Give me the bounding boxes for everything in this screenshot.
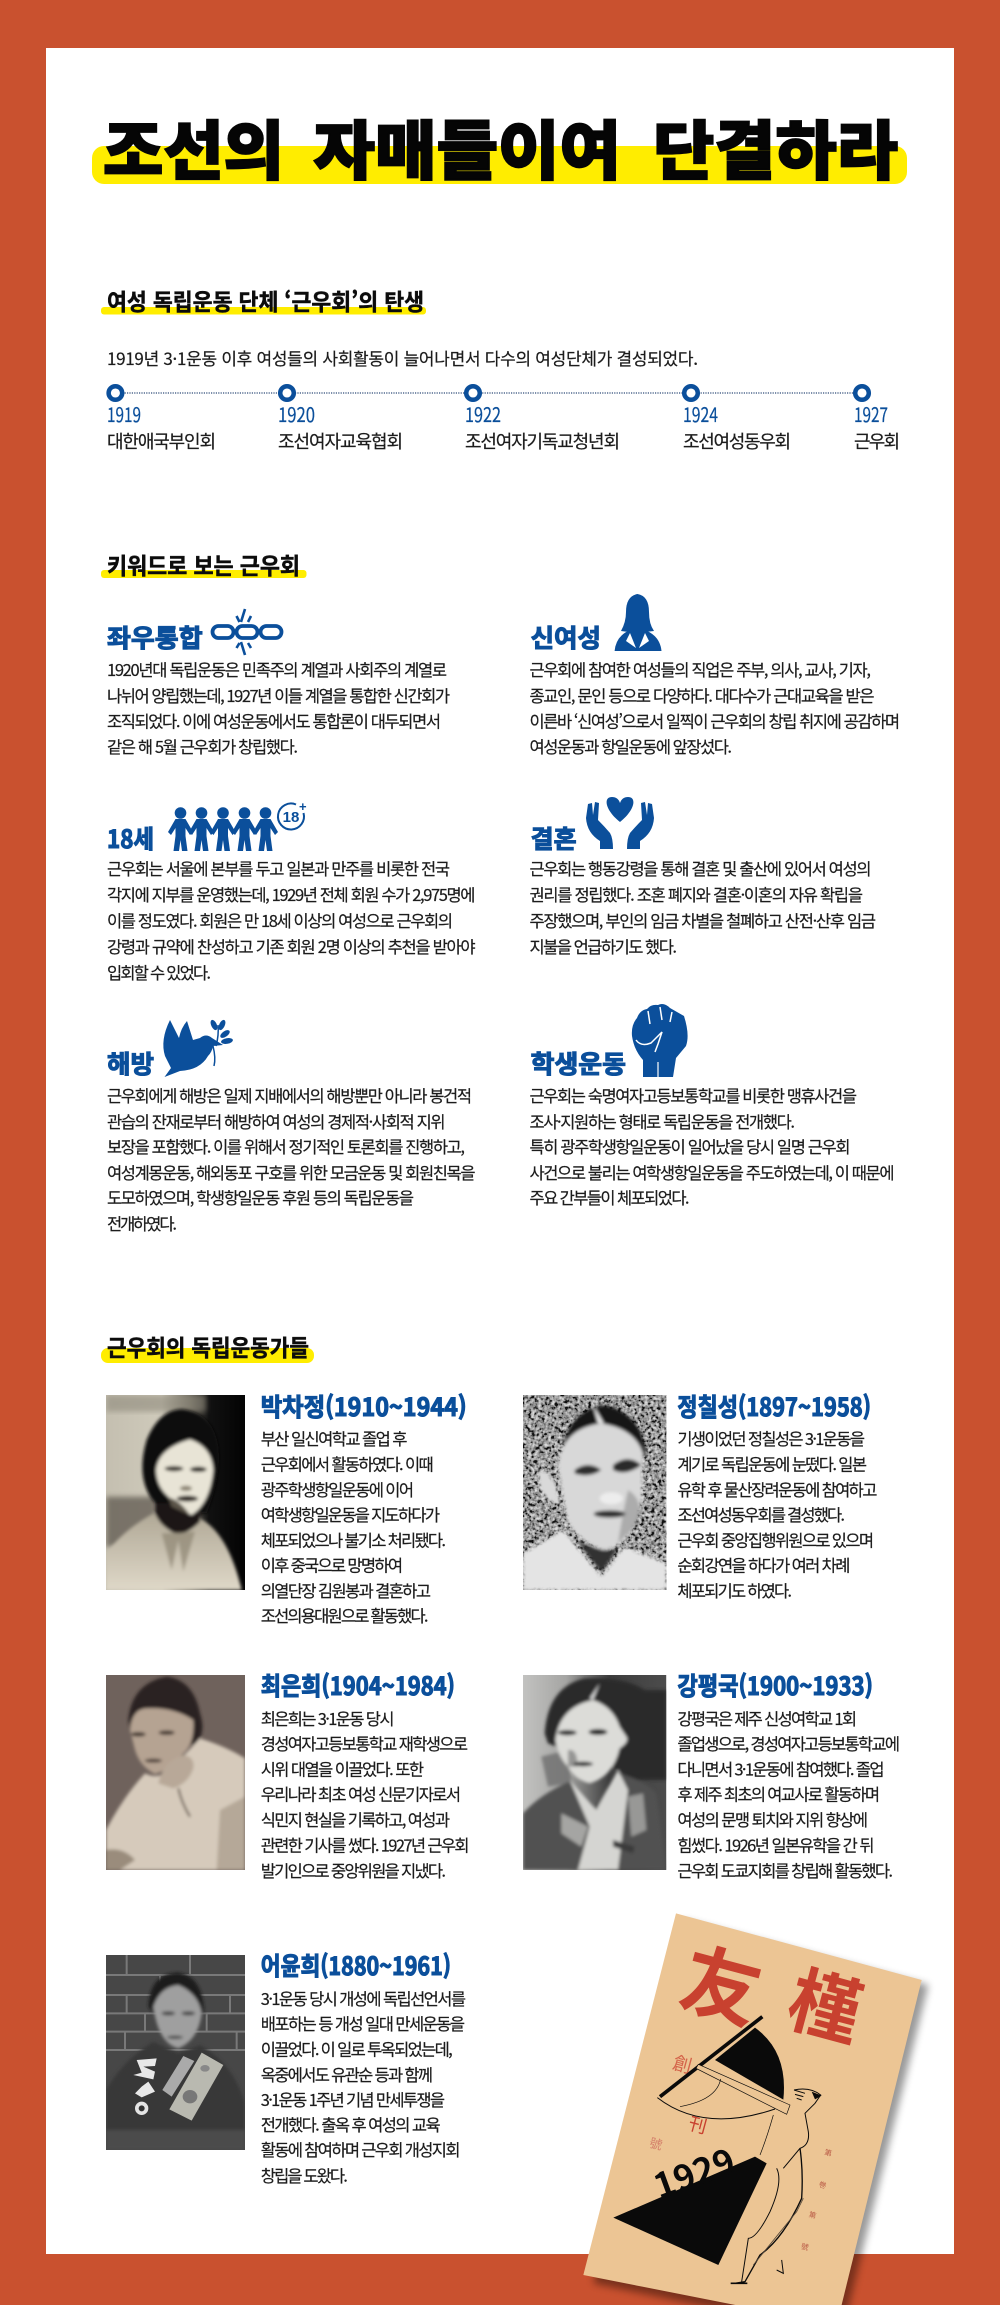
portrait: 박차정 bbox=[106, 1395, 245, 1590]
bio text: 다니면서 3·1운동에 참여했다. 졸업 bbox=[677, 1756, 884, 1780]
cover illustration: flag, figure, 1929 mountain: 1929 bbox=[646, 2134, 741, 2209]
keyword block: 신여성: 이른바 ‘신여성’으로서 일찍이 근우회의 창립 취지에 공감하며 bbox=[530, 708, 900, 732]
bio text bbox=[677, 1706, 900, 1882]
bio text: 순회강연을 하다가 여러 차례 bbox=[677, 1552, 850, 1576]
bio text: 여학생항일운동을 지도하다가 bbox=[261, 1502, 440, 1526]
keyword block: 해방: 여성계몽운동, 해외동포 구호를 위한 모금운동 및 회원친목을 bbox=[107, 1160, 476, 1184]
bio text: 부산 일신여학교 졸업 후 bbox=[261, 1426, 407, 1450]
icon: raised fist bbox=[632, 1004, 688, 1077]
keyword block: 신여성: 여성운동과 항일운동에 앞장섰다. bbox=[530, 734, 732, 758]
keyword block: 좌우통합: 나뉘어 양립했는데, 1927년 이들 계열을 통합한 신간회가 bbox=[107, 683, 450, 707]
cover shadow bbox=[593, 1920, 928, 2305]
bio text: 근우회 도쿄지회를 창립해 활동했다. bbox=[677, 1858, 893, 1882]
timeline: 1924 bbox=[683, 399, 718, 428]
keyword block: 신여성: 종교인, 문인 등으로 다양하다. 대다수가 근대교육을 받은 bbox=[530, 683, 874, 707]
bio text: 이후 중국으로 망명하여 bbox=[261, 1552, 403, 1576]
bio text: 식민지 현실을 기록하고, 여성과 bbox=[261, 1807, 450, 1831]
keyword block: 18세: 18세 bbox=[107, 820, 154, 856]
icon: broken chain bbox=[212, 609, 282, 655]
name: 어윤희(1880~1961) bbox=[261, 1947, 451, 1983]
keyword block: 학생운동: 사건으로 불리는 여학생항일운동을 주도하였는데, 이 때문에 bbox=[530, 1160, 894, 1184]
keyword block: 좌우통합: 조직되었다. 이에 여성운동에서도 통합론이 대두되면서 bbox=[107, 708, 441, 732]
keyword block: 좌우통합: 좌우통합 bbox=[107, 619, 203, 655]
bio text: 시위 대열을 이끌었다. 또한 bbox=[261, 1756, 424, 1780]
bio text: 후 제주 최초의 여교사로 활동하며 bbox=[677, 1782, 880, 1806]
keyword block: 결혼: 결혼 bbox=[531, 820, 577, 856]
keyword block: 신여성: 근우회에 참여한 여성들의 직업은 주부, 의사, 교사, 기자, bbox=[530, 657, 871, 681]
keyword block: 해방 bbox=[107, 1019, 476, 1235]
name: 강평국(1900~1933) bbox=[677, 1667, 873, 1703]
keyword block: 해방: 관습의 잔재로부터 해방하여 여성의 경제적·사회적 지위 bbox=[107, 1109, 446, 1133]
keyword block: 결혼: 주장했으며, 부인의 임금 차별을 철폐하고 산전·산후 임금 bbox=[530, 908, 876, 932]
icon: 18+ badge: + bbox=[299, 799, 307, 814]
bio text: 체포되기도 하였다. bbox=[677, 1578, 792, 1602]
keyword block: 18세 bbox=[107, 799, 476, 984]
activist: 정칠성 bbox=[523, 1388, 877, 1602]
timeline: 근우회 bbox=[854, 428, 900, 454]
keyword block: 해방: 도모하였으며, 학생항일운동 후원 등의 독립운동을 bbox=[107, 1185, 414, 1209]
timeline: 대한애국부인회 bbox=[107, 428, 216, 454]
bio text bbox=[261, 1426, 446, 1627]
activist: 최은희 bbox=[106, 1667, 470, 1882]
icon: 18+ badge bbox=[278, 799, 307, 829]
cover title: 號 bbox=[800, 2241, 810, 2253]
timeline: 1922 bbox=[465, 399, 501, 428]
keyword block: 18세: 입회할 수 있었다. bbox=[107, 960, 211, 984]
activist: 강평국 bbox=[523, 1667, 900, 1882]
keyword block: 해방: 보장을 포함했다. 이를 위해서 정기적인 토론회를 진행하고, bbox=[107, 1134, 465, 1158]
bio text: 강평국은 제주 신성여학교 1회 bbox=[677, 1706, 857, 1730]
bio text: 활동에 참여하며 근우회 개성지회 bbox=[261, 2137, 460, 2161]
keyword block: 학생운동: 특히 광주학생항일운동이 일어났을 당시 일명 근우회 bbox=[530, 1134, 850, 1158]
intro text: 1919년 3·1운동 이후 여성들의 사회활동이 늘어나면서 다수의 여성단체가 결성되었다. bbox=[107, 345, 698, 370]
bio text: 경성여자고등보통학교 재학생으로 bbox=[261, 1731, 468, 1755]
timeline: 1927 bbox=[854, 399, 888, 428]
bio text: 여성의 문맹 퇴치와 지위 향상에 bbox=[677, 1807, 868, 1831]
bio text: 3·1운동 1주년 기념 만세투쟁을 bbox=[261, 2087, 445, 2111]
section heading: 근우회의 독립운동가들 bbox=[107, 1329, 309, 1363]
timeline: 조선여자교육협회 bbox=[278, 428, 403, 454]
timeline bbox=[107, 386, 900, 454]
bio text: 계기로 독립운동에 눈떴다. 일본 bbox=[677, 1452, 867, 1476]
keyword block: 해방: 해방 bbox=[107, 1045, 154, 1081]
bio text: 조선여성동우회를 결성했다. bbox=[677, 1502, 845, 1526]
icon: five people bbox=[168, 807, 278, 851]
bio text: 유학 후 물산장려운동에 참여하고 bbox=[677, 1477, 877, 1501]
bio text: 체포되었으나 불기소 처리됐다. bbox=[261, 1528, 446, 1552]
title bbox=[92, 101, 907, 193]
keyword block: 18세: 근우회는 서울에 본부를 두고 일본과 만주를 비롯한 전국 bbox=[107, 856, 450, 880]
bio text: 전개했다. 출옥 후 여성의 교육 bbox=[261, 2112, 441, 2136]
section: founding of Geunuhoe bbox=[101, 283, 900, 454]
keyword block: 신여성: 신여성 bbox=[531, 619, 601, 655]
keyword block: 학생운동: 학생운동 bbox=[531, 1045, 626, 1081]
bio text: 의열단장 김원봉과 결혼하고 bbox=[261, 1578, 431, 1602]
keyword block: 신여성 bbox=[530, 594, 900, 758]
bio text: 발기인으로 중앙위원을 지냈다. bbox=[261, 1858, 446, 1882]
cover title: 創 bbox=[670, 2048, 695, 2079]
keyword block: 해방: 근우회에게 해방은 일제 지배에서의 해방뿐만 아니라 봉건적 bbox=[107, 1083, 472, 1107]
bio text: 최은희는 3·1운동 당시 bbox=[261, 1706, 394, 1730]
cover title: 友 bbox=[670, 1916, 775, 2046]
bio text: 배포하는 등 개성 일대 만세운동을 bbox=[261, 2011, 465, 2035]
icon: hands holding heart bbox=[586, 797, 654, 849]
icon: 18+ badge: 18 bbox=[283, 809, 299, 826]
section: activists bbox=[101, 1329, 900, 2187]
cover title: 槿 bbox=[778, 1941, 875, 2061]
cover paper bbox=[583, 1913, 922, 2305]
cover title: 第 bbox=[808, 2209, 817, 2221]
cover title bbox=[648, 1916, 875, 2253]
bio text: 근우회 중앙집행위원으로 있으며 bbox=[677, 1528, 874, 1552]
bio text: 창립을 도왔다. bbox=[261, 2163, 348, 2187]
cover title: 號 bbox=[648, 2132, 665, 2154]
section heading: 키워드로 보는 근우회 bbox=[107, 547, 300, 581]
timeline: 조선여성동우회 bbox=[683, 428, 791, 454]
keyword block: 결혼: 권리를 정립했다. 조혼 폐지와 결혼·이혼의 자유 확립을 bbox=[530, 882, 863, 906]
cover illustration: flag, figure, 1929 mountain bbox=[613, 2017, 822, 2283]
bio text: 3·1운동 당시 개성에 독립선언서를 bbox=[261, 1986, 466, 2010]
name: 정칠성(1897~1958) bbox=[677, 1388, 871, 1424]
keyword block: 학생운동: 주요 간부들이 체포되었다. bbox=[530, 1185, 690, 1209]
bio text: 기생이었던 정칠성은 3·1운동을 bbox=[677, 1426, 865, 1450]
keyword block: 18세: 각지에 지부를 운영했는데, 1929년 전체 회원 수가 2,975명에 bbox=[107, 882, 475, 906]
title word 2: 자매들이여 bbox=[314, 101, 621, 193]
bio text: 조선의용대원으로 활동했다. bbox=[261, 1603, 428, 1627]
keyword block: 좌우통합 bbox=[107, 609, 450, 758]
bio text: 힘썼다. 1926년 일본유학을 간 뒤 bbox=[677, 1832, 874, 1856]
name: 최은희(1904~1984) bbox=[261, 1667, 455, 1703]
section heading: 여성 독립운동 단체 ‘근우회’의 탄생 bbox=[107, 283, 424, 317]
portrait: 어윤희 bbox=[106, 1955, 245, 2150]
keyword block: 좌우통합: 같은 해 5월 근우회가 창립했다. bbox=[107, 734, 298, 758]
keyword block: 학생운동: 근우회는 숙명여자고등보통학교를 비롯한 맹휴사건을 bbox=[530, 1083, 857, 1107]
keyword block: 학생운동 bbox=[530, 1004, 894, 1209]
timeline: 1919 bbox=[107, 399, 141, 428]
cover title: 刊 bbox=[686, 2110, 710, 2139]
bio text: 졸업생으로, 경성여자고등보통학교에 bbox=[677, 1731, 900, 1755]
timeline: 1920 bbox=[278, 399, 315, 428]
keyword block: 해방: 전개하였다. bbox=[107, 1211, 177, 1235]
keyword block: 18세: 이를 정도였다. 회원은 만 18세 이상의 여성으로 근우회의 bbox=[107, 908, 453, 932]
section: keywords bbox=[101, 547, 900, 1235]
activist: 박차정 bbox=[106, 1388, 467, 1627]
icon: dove bbox=[163, 1019, 233, 1077]
bio text bbox=[261, 1986, 466, 2187]
bio text: 관련한 기사를 썼다. 1927년 근우회 bbox=[261, 1832, 470, 1856]
cover title: 第 bbox=[823, 2147, 833, 2159]
portrait: 최은희 bbox=[106, 1675, 245, 1870]
keyword block: 결혼: 근우회는 행동강령을 통해 결혼 및 출산에 있어서 여성의 bbox=[530, 856, 872, 880]
title word 1: 조선의 bbox=[103, 101, 284, 193]
portrait: 강평국 bbox=[523, 1675, 666, 1870]
timeline: 조선여자기독교청년회 bbox=[465, 428, 620, 454]
bio text bbox=[261, 1706, 470, 1882]
activist: 어윤희 bbox=[106, 1947, 466, 2187]
bio text: 우리나라 최초 여성 신문기자로서 bbox=[261, 1782, 461, 1806]
magazine cover: 우권 1929 bbox=[583, 1913, 928, 2305]
keyword block: 결혼: 지불을 언급하기도 했다. bbox=[530, 934, 677, 958]
bio text: 이끌었다. 이 일로 투옥되었는데, bbox=[261, 2036, 453, 2060]
name: 박차정(1910~1944) bbox=[261, 1388, 467, 1424]
portrait: 정칠성 bbox=[523, 1395, 666, 1590]
keyword block: 18세: 강령과 규약에 찬성하고 기존 회원 2명 이상의 추천을 받아야 bbox=[107, 934, 476, 958]
bio text: 근우회에서 활동하였다. 이때 bbox=[261, 1452, 434, 1476]
title word 3: 단결하라 bbox=[653, 101, 898, 193]
keyword block: 학생운동: 조사·지원하는 형태로 독립운동을 전개했다. bbox=[530, 1109, 795, 1133]
bio text: 옥중에서도 유관순 등과 함께 bbox=[261, 2062, 433, 2086]
bio text: 광주학생항일운동에 이어 bbox=[261, 1477, 414, 1501]
title highlight bbox=[92, 146, 907, 184]
icon: woman bbox=[615, 594, 662, 651]
cover title: 卷 bbox=[818, 2179, 828, 2192]
keyword block: 좌우통합: 1920년대 독립운동은 민족주의 계열과 사회주의 계열로 bbox=[107, 657, 447, 681]
keyword block: 결혼 bbox=[530, 797, 876, 958]
bio text bbox=[677, 1426, 877, 1602]
